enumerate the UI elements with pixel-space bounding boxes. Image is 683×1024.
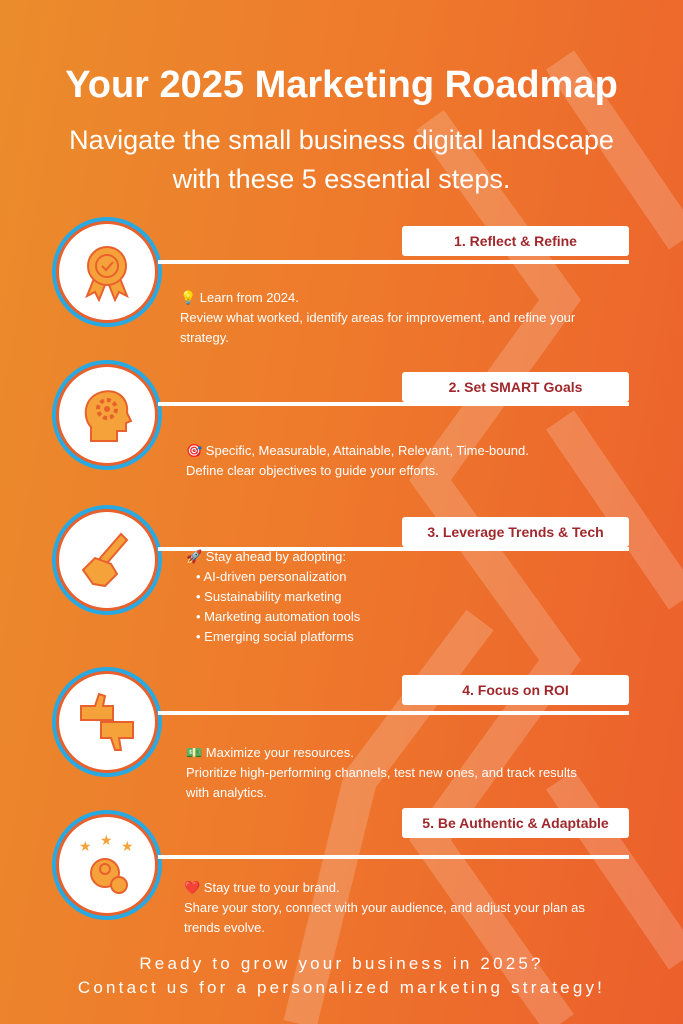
footer call to action [78, 954, 605, 997]
step 2 [52, 360, 629, 478]
title: Your 2025 Marketing Roadmap [65, 64, 618, 106]
text: • AI-driven personalization [196, 569, 347, 584]
text: with analytics. [186, 785, 267, 800]
label [402, 808, 629, 838]
text: Define clear objectives to guide your efforts. [186, 463, 439, 478]
subtitle [69, 125, 614, 194]
text: 🎯 Specific, Measurable, Attainable, Relevant, Time-bound. [186, 443, 529, 458]
text: • Sustainability marketing [196, 589, 341, 604]
label [402, 372, 629, 402]
text: 💵 Maximize your resources. [186, 745, 354, 760]
step 3 [52, 505, 629, 644]
label: 1. Reflect & Refine [454, 233, 577, 249]
text: Review what worked, identify areas for improvement, and refine your strategy. [180, 310, 575, 345]
text: Share your story, connect with your audience, and adjust your plan as trends evolve. [184, 900, 585, 935]
icon: hand with pencil [56, 509, 158, 611]
icon: stars and person: ★ [79, 838, 92, 854]
text: • Emerging social platforms [196, 629, 354, 644]
label [402, 226, 629, 256]
icon: head with gear [56, 364, 158, 466]
text [186, 443, 529, 478]
step 1 [52, 217, 629, 345]
text [186, 549, 360, 644]
subtitle: with these 5 essential steps. [173, 164, 510, 194]
icon: stars and person [56, 814, 158, 916]
label: 2. Set SMART Goals [449, 379, 582, 395]
label: 5. Be Authentic & Adaptable [422, 815, 609, 831]
text: ❤️ Stay true to your brand. [184, 880, 340, 895]
step 4 [52, 667, 629, 800]
label: 4. Focus on ROI [462, 682, 569, 698]
label: 3. Leverage Trends & Tech [427, 524, 604, 540]
text [180, 290, 575, 345]
footer call to action: Ready to grow your business in 2025? [139, 954, 544, 973]
label [402, 517, 629, 547]
subtitle: Navigate the small business digital landscape [69, 125, 614, 155]
text [186, 745, 577, 800]
icon: stars and person: ★ [121, 838, 134, 854]
text [184, 880, 585, 935]
label [402, 675, 629, 705]
text: 💡 Learn from 2024. [180, 290, 299, 305]
icon: thumbs up and down [56, 671, 158, 773]
text: 🚀 Stay ahead by adopting: [186, 549, 346, 564]
text: • Marketing automation tools [196, 609, 360, 624]
step 5 [52, 808, 629, 935]
icon: award ribbon [56, 221, 158, 323]
text: Prioritize high-performing channels, test new ones, and track results [186, 765, 577, 780]
footer call to action: Contact us for a personalized marketing strategy! [78, 978, 605, 997]
